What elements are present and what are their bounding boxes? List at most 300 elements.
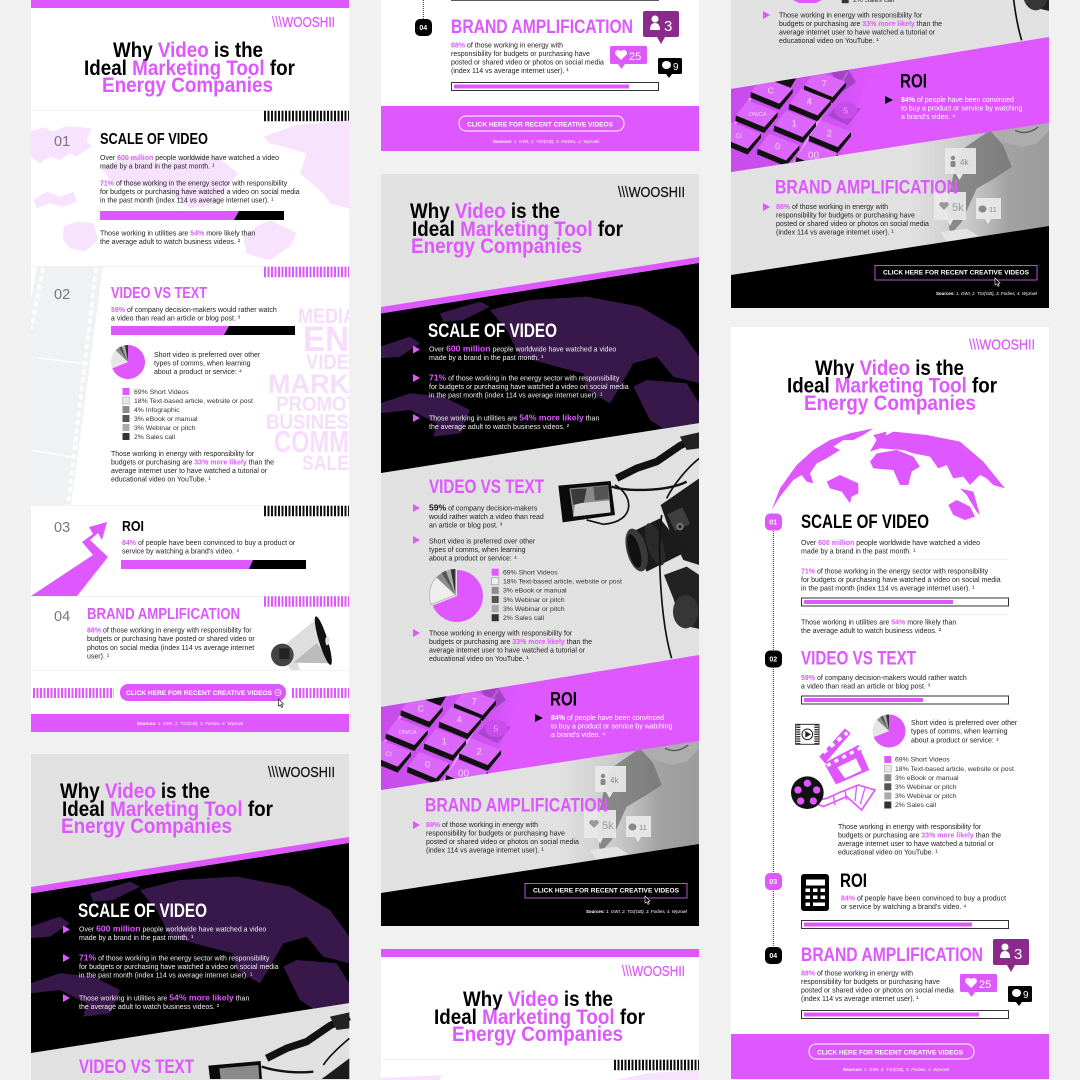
icon: rising arrow xyxy=(31,522,108,596)
calculator photo: 2 xyxy=(477,746,482,756)
button: call to action xyxy=(459,116,624,131)
icons: film and clapper xyxy=(791,724,875,810)
social badge: followers xyxy=(643,11,679,44)
section: video text end: budgets or purchasing are 33% more likely than the xyxy=(779,21,942,28)
timeline dotted line xyxy=(772,531,774,947)
section 02: video vs text: average internet user to have watched a tutorial or xyxy=(838,841,995,848)
title: Energy Companies xyxy=(61,815,232,838)
accent stripe xyxy=(31,837,349,894)
film strip background xyxy=(31,266,103,505)
black band xyxy=(31,843,349,1053)
button: call to action: CLICK HERE FOR RECENT CREATIVE VIDEOS xyxy=(533,888,680,894)
icon: video camera xyxy=(558,432,699,658)
section 03: ROI xyxy=(801,871,1008,928)
progress bar xyxy=(802,920,1008,928)
section 02: video vs text: Short video is preferred over other xyxy=(154,352,261,359)
pie legend xyxy=(122,388,253,441)
button: call to action: CLICK HERE FOR RECENT CREATIVE VIDEOS xyxy=(817,1049,964,1056)
section 04: brand amplification: BRAND AMPLIFICATION xyxy=(801,945,983,966)
title: Ideal Marketing Tool for xyxy=(84,57,295,80)
calculator photo xyxy=(719,52,871,182)
icon: video camera lower part xyxy=(1010,0,1049,40)
calculator photo: 5 xyxy=(493,724,498,734)
calculator photo: CI xyxy=(735,133,742,140)
pie chart base xyxy=(793,0,822,3)
section: brand amplification xyxy=(413,741,699,862)
pie legend: 69% Short Videos xyxy=(503,570,558,576)
section 02: video vs text: budgets or purchasing are 33% more likely than the xyxy=(111,460,274,467)
pie legend: 18% Text-based article, website or post xyxy=(134,398,253,405)
section 02: video vs text: budgets or purchasing are 33% more likely than the xyxy=(838,833,1001,840)
icon: video camera top xyxy=(208,1012,349,1079)
section 03: ROI: 03 xyxy=(54,520,70,536)
pie legend: 3% Webinar or pitch xyxy=(503,606,565,613)
icon: megaphone xyxy=(271,615,335,672)
logo: \\\WOOSHII xyxy=(618,184,685,201)
section: ROI band: a brand's video. ⁴ xyxy=(901,114,955,121)
title xyxy=(434,988,645,1046)
pie legend: 3% eBook or manual xyxy=(895,775,959,782)
section: brand amplification: BRAND AMPLIFICATION xyxy=(775,178,958,199)
social badge: comments xyxy=(1008,986,1032,1006)
section: scale of video: in the past month (index 114 vs average internet user). ¹ xyxy=(79,972,253,979)
section: scale of video: in the past month (index 114 vs average internet user). ¹ xyxy=(429,392,603,399)
button: call to action: CLICK HERE FOR RECENT CREATIVE VIDEOS xyxy=(467,121,614,128)
section 02: video vs text: 59% of company decision-makers would rather watch xyxy=(801,675,967,682)
section 04: brand amplification: BRAND AMPLIFICATION xyxy=(87,606,240,623)
section 01: scale of video: in the past month (index 114 vs average internet user). ¹ xyxy=(801,586,975,593)
calculator photo: 0 xyxy=(425,760,430,770)
section 04: brand amplification: 88% of those working in energy with responsibility for xyxy=(87,628,252,635)
badge 04: 04 xyxy=(769,953,777,960)
pie legend xyxy=(492,569,622,622)
footer: black band: Sources: 1. GWI, 2. TGI(GB), 3. Forbes, 4. Wyzowl xyxy=(936,291,1038,296)
social badge: comments: 9 xyxy=(673,62,679,73)
progress bar xyxy=(802,598,1008,606)
section: brand amplification: posted or shared video or photos on social media xyxy=(426,839,579,846)
section 02: video vs text: VIDEO VS TEXT xyxy=(111,285,207,302)
section 03: ROI: 84% of people have been convinced to buy a product or xyxy=(122,540,296,547)
pie legend: 2% Sales call xyxy=(134,434,176,441)
social badge: followers xyxy=(993,939,1029,972)
badge 02: 02 xyxy=(769,656,777,664)
section: ROI band xyxy=(719,37,1049,182)
roi bar end xyxy=(451,0,659,2)
progress bar xyxy=(111,326,295,335)
title: Energy Companies xyxy=(411,235,582,258)
pie chart xyxy=(429,569,483,622)
section 02: video vs text: types of comms, when learning xyxy=(911,729,1008,736)
calculator photo: 00 xyxy=(808,151,820,162)
calculator photo: ON/CA xyxy=(749,112,767,118)
word cloud: EN xyxy=(303,320,349,359)
pie legend: 69% Short Videos xyxy=(134,389,189,396)
pie legend: 18% Text-based article, website or post xyxy=(503,579,622,586)
section 02: video vs text xyxy=(791,648,1018,856)
section: scale of video: Over 600 million people worldwide have watched a video xyxy=(79,924,266,934)
progress bar xyxy=(100,211,284,220)
section: brand amplification: (index 114 vs average internet user). ¹ xyxy=(776,230,894,237)
section 01: scale of video xyxy=(54,131,300,246)
pie legend: 4% Infographic xyxy=(134,407,180,414)
section 01: scale of video: made by a brand in the past month. ¹ xyxy=(801,549,916,556)
pie legend: 18% Text-based article, website or post xyxy=(895,766,1014,773)
pie legend: 69% Short Videos xyxy=(895,757,950,764)
icon: cursor xyxy=(645,896,650,904)
section 04: brand amplification: budgets or purchasing have posted or shared video or xyxy=(87,636,255,643)
black band xyxy=(381,263,699,473)
pie legend: 3% eBook or manual xyxy=(134,416,198,423)
section 01: scale of video: the average adult to watch business videos. ² xyxy=(801,628,942,635)
social badge: likes xyxy=(610,46,647,69)
footer xyxy=(381,106,699,151)
section: ROI band: ROI xyxy=(900,72,927,93)
section 01: scale of video: made by a brand in the past month. ¹ xyxy=(100,164,215,171)
section 01: scale of video: for budgets or purchasing have watched a video on social media xyxy=(100,189,300,196)
title xyxy=(410,200,623,258)
section 04: brand amplification xyxy=(801,939,1032,1018)
footer: Sources: 1. GWI, 2. TGI(GB), 3. Forbes, 4. Wyzowl xyxy=(843,1067,950,1072)
notification: likes xyxy=(584,810,616,844)
calculator photo: 5 xyxy=(843,106,848,116)
section: video vs text: would rather watch a video than read xyxy=(428,514,544,521)
social badge: followers: 3 xyxy=(1014,946,1022,963)
section: video text end: Those working in energy with responsibility for xyxy=(779,12,923,20)
panel: timeline layout card, lower part in middle column xyxy=(381,0,699,151)
section 02: video vs text: educational video on YouTube. ¹ xyxy=(838,850,938,856)
section: scale of video: SCALE OF VIDEO xyxy=(428,321,557,342)
section 04: brand amplification: 04 xyxy=(54,609,70,625)
pie legend: 3% Webinar or pitch xyxy=(134,425,196,432)
section: scale of video: made by a brand in the past month. ¹ xyxy=(79,935,194,942)
badge 01: 01 xyxy=(769,520,777,526)
section: brand amplification: 88% of those working in energy with xyxy=(426,822,538,829)
title: Energy Companies xyxy=(452,1023,623,1046)
section 02: video vs text: about a product or service: ⁴ xyxy=(154,369,242,376)
notification: likes: 5k xyxy=(952,202,964,214)
button: call to action: CLICK HERE FOR RECENT CREATIVE VIDEOS xyxy=(883,270,1030,276)
notification: followers xyxy=(595,766,626,798)
social badge: likes: 25 xyxy=(629,51,641,63)
social badge: comments xyxy=(658,58,682,78)
footer: sources xyxy=(31,714,349,732)
notification: comments xyxy=(976,198,1001,224)
button: call to action xyxy=(525,884,687,898)
section: brand amplification: 88% of those working in energy with xyxy=(776,204,888,211)
section: video vs text: 59% of company decision-makers xyxy=(429,502,538,512)
section 02: video vs text: a video than read an article or blog post. ³ xyxy=(801,684,931,691)
progress bar xyxy=(802,1010,1008,1018)
section: video vs text: about a product or service: ⁴ xyxy=(429,555,517,562)
badge 01 xyxy=(765,514,782,530)
section: video vs text: types of comms, when learning xyxy=(429,547,526,554)
logo: \\\WOOSHII xyxy=(969,337,1035,354)
notification: comments xyxy=(626,816,651,842)
button: call to action xyxy=(875,266,1037,280)
section: scale of video: made by a brand in the past month. ¹ xyxy=(429,355,544,362)
panel: white layout card, top part in middle column xyxy=(381,949,699,1080)
icon: calculator xyxy=(801,874,829,911)
section: video text end: average internet user to have watched a tutorial or xyxy=(779,30,936,37)
section 01: scale of video: in the past month (index 114 vs average internet user). ¹ xyxy=(100,198,274,204)
section 01: scale of video: 71% of those working in the energy sector with responsibility xyxy=(801,569,989,576)
badge 04 xyxy=(765,947,782,964)
section: brand amplification: responsibility for budgets or purchasing have xyxy=(776,213,915,220)
footer xyxy=(731,1034,1049,1079)
panel: dark layout card, middle column xyxy=(369,174,700,926)
section: scale of video: the average adult to watch business videos. ² xyxy=(429,424,570,431)
section 01: scale of video: SCALE OF VIDEO xyxy=(801,512,929,533)
section: scale of video: the average adult to watch business videos. ² xyxy=(79,1004,220,1011)
section: scale of video: Over 600 million people worldwide have watched a video xyxy=(429,344,616,354)
pie legend: 3% Webinar or pitch xyxy=(895,784,957,791)
pie legend: 3% Webinar or pitch xyxy=(895,793,957,800)
section: brand amplification: posted or shared video or photos on social media xyxy=(451,60,604,66)
calculator photo: 4 xyxy=(807,97,812,107)
section 03: ROI: ROI xyxy=(122,518,144,535)
word cloud xyxy=(267,308,349,470)
footer: black band xyxy=(731,226,1049,308)
social badge: likes: 25 xyxy=(979,979,991,991)
section: video text end xyxy=(763,11,942,45)
pie legend: 3% eBook or manual xyxy=(503,588,567,595)
button: call to action xyxy=(120,684,286,701)
icon: cursor xyxy=(278,699,284,707)
section: ROI band: 84% of people have been convinced xyxy=(551,715,664,722)
section 04: brand amplification: 88% of those working in energy with xyxy=(801,970,913,978)
title: Why Video is the xyxy=(113,39,263,62)
section: ROI band: 84% of people have been convinced xyxy=(901,97,1014,104)
section: ROI band: to buy a product or service by watching xyxy=(551,724,673,731)
section 02: video vs text: Those working in energy with responsibility for xyxy=(111,451,255,458)
section: brand amplification: (index 114 vs average internet user). ¹ xyxy=(451,68,569,75)
badge 02 xyxy=(765,650,782,668)
word cloud: MEDIA xyxy=(298,305,356,328)
world map background xyxy=(381,1070,699,1080)
top accent bar xyxy=(381,949,699,957)
section 04: brand amplification: user). ¹ xyxy=(87,654,110,660)
button: call to action xyxy=(809,1044,974,1059)
section 04: brand amplification xyxy=(54,606,335,672)
section 01: scale of video: for budgets or purchasing have watched a video on social media xyxy=(801,577,1001,584)
section 01: scale of video: 71% of those working in the energy sector with responsibility xyxy=(100,180,288,188)
pie chart xyxy=(872,714,905,748)
section: ROI band: to buy a product or service by watching xyxy=(901,106,1023,113)
calculator photo: CI xyxy=(385,751,392,758)
title: Energy Companies xyxy=(102,74,273,97)
pie legend: 2% Sales call xyxy=(895,802,937,809)
heading: video vs text: VIDEO VS TEXT xyxy=(79,1057,194,1078)
section: scale of video: for budgets or purchasing have watched a video on social media xyxy=(429,384,629,391)
panel: white layout card, left column xyxy=(31,0,358,732)
word cloud: VIDE xyxy=(306,351,349,374)
calculator photo: 1 xyxy=(792,118,797,128)
pie legend: 3% Webinar or pitch xyxy=(503,597,565,604)
section: video vs text: Short video is preferred over other xyxy=(429,538,536,545)
section 02: video vs text xyxy=(54,285,295,484)
globe xyxy=(772,428,1005,520)
progress bar xyxy=(452,82,658,90)
section: brand amplification: posted or shared video or photos on social media xyxy=(776,221,929,228)
panel: dark layout card, lower part in right column xyxy=(719,0,1050,308)
section 02: video vs text: 02 xyxy=(54,287,70,303)
section 03: ROI: service by watching a brand's video. ⁴ xyxy=(122,549,239,556)
title xyxy=(787,357,997,415)
section 01: scale of video: Over 600 million people worldwide have watched a video xyxy=(100,155,279,162)
pie legend: 2% Sales call xyxy=(503,615,545,622)
section: video vs text: budgets or purchasing are 33% more likely than the xyxy=(429,639,592,646)
section: scale of video: SCALE OF VIDEO xyxy=(78,901,207,922)
section 04: brand amplification: posted or shared video or photos on social media xyxy=(801,988,954,994)
section: video vs text xyxy=(413,477,622,663)
section 03: ROI: ROI xyxy=(840,871,867,892)
section: ROI band xyxy=(381,655,699,790)
social badge: followers: 3 xyxy=(664,18,672,35)
logo: \\\WOOSHII xyxy=(268,764,335,781)
section: brand amplification: responsibility for budgets or purchasing have xyxy=(451,51,590,58)
section 01: scale of video: Those working in utilities are 54% more likely than xyxy=(801,620,956,627)
top accent bar xyxy=(31,0,349,8)
section: scale of video: Those working in utilities are 54% more likely than xyxy=(429,413,599,423)
badge 03: 03 xyxy=(769,879,777,886)
social badge: comments: 9 xyxy=(1023,990,1029,1001)
calculator photo: C xyxy=(768,85,774,95)
section: ROI band: a brand's video. ⁴ xyxy=(551,732,605,739)
photo: woman on phone xyxy=(580,741,699,862)
section 02: video vs text: 59% of company decision-makers would rather watch xyxy=(111,307,277,314)
calculator photo: ON/CA xyxy=(399,730,417,736)
section 02: video vs text: about a product or service: ⁴ xyxy=(911,737,999,744)
section 02: video vs text: VIDEO VS TEXT xyxy=(801,648,916,669)
calculator photo: 00 xyxy=(458,769,470,780)
section 02: video vs text: Short video is preferred over other xyxy=(911,720,1018,727)
section: brand amplification: 88% of those working in energy with xyxy=(451,42,563,50)
section: scale of video: Those working in utilities are 54% more likely than xyxy=(79,993,249,1003)
title: Why Video is the xyxy=(463,988,613,1011)
section 03: ROI xyxy=(31,518,306,596)
footer: Sources: 1. GWI, 2. TGI(GB), 3. Forbes, 4. Wyzowl xyxy=(493,139,600,144)
section: video vs text: average internet user to have watched a tutorial or xyxy=(429,648,586,655)
section: video vs text: VIDEO VS TEXT xyxy=(429,477,544,498)
section 04: brand amplification: photos on social media (index 114 vs average internet xyxy=(87,645,254,652)
notification: followers: 4k xyxy=(610,776,619,785)
calculator photo: 1 xyxy=(442,736,447,746)
calculator photo: 7 xyxy=(472,696,477,706)
notification: comments: 11 xyxy=(989,205,997,214)
section 04: brand amplification: (index 114 vs average internet user). ¹ xyxy=(801,996,919,1003)
section 01: scale of video xyxy=(801,512,1008,635)
section: scale of video: 71% of those working in the energy sector with responsibility xyxy=(429,372,620,382)
accent stripe xyxy=(381,257,699,314)
section 04: brand amplification: responsibility for budgets or purchasing have xyxy=(801,979,940,986)
section 03: ROI: or service by watching a brand's video. ⁴ xyxy=(841,904,966,911)
section: brand amplification: BRAND AMPLIFICATION xyxy=(451,17,633,38)
panel: timeline layout card, right column xyxy=(731,327,1049,1079)
section: brand amplification xyxy=(763,112,1050,252)
section: video vs text: educational video on YouTube. ¹ xyxy=(429,656,529,663)
notification: comments: 11 xyxy=(639,823,647,832)
title: Energy Companies xyxy=(804,392,976,415)
section 01: scale of video: Those working in utilities are 54% more likely than xyxy=(100,230,255,238)
section 02: video vs text: Those working in energy with responsibility for xyxy=(838,824,982,831)
word cloud: BUSINES xyxy=(266,411,349,434)
badge 04: 04 xyxy=(419,25,427,32)
social badge: likes xyxy=(960,974,997,997)
calculator photo: 0 xyxy=(775,142,780,152)
logo: \\\WOOSHII xyxy=(272,14,335,31)
footer: sources: Sources: 1. GWI, 2. TGI(GB), 3. Forbes, 4. Wyzowl xyxy=(137,721,244,726)
title xyxy=(60,780,273,838)
section 03: ROI: 84% of people have been convinced to buy a product xyxy=(841,896,1006,903)
section: video vs text: Those working in energy with responsibility for xyxy=(429,630,573,638)
section: video vs text: an article or blog post. ³ xyxy=(429,522,503,530)
section 01: scale of video: 01 xyxy=(54,134,70,150)
section: scale of video xyxy=(413,321,629,431)
word cloud: MARK xyxy=(268,369,349,399)
title: Ideal Marketing Tool for xyxy=(412,218,623,241)
section: brand amplification xyxy=(451,11,682,90)
notification: followers: 4k xyxy=(960,158,969,167)
section 01: scale of video: the average adult to watch business videos. ² xyxy=(100,239,241,246)
title xyxy=(84,39,295,97)
footer: black band: Sources: 1. GWI, 2. TGI(GB), 3. Forbes, 4. Wyzowl xyxy=(586,909,688,914)
section: ROI band: ROI xyxy=(550,690,577,711)
notification: likes: 5k xyxy=(602,820,614,832)
badge 04 xyxy=(415,19,432,36)
pie legend xyxy=(884,756,1014,809)
pie chart xyxy=(111,345,145,379)
title: Ideal Marketing Tool for xyxy=(434,1006,645,1029)
word cloud: SALE xyxy=(302,452,349,475)
title: Ideal Marketing Tool for xyxy=(787,375,997,398)
title: Why Video is the xyxy=(60,780,210,803)
calculator photo xyxy=(381,684,521,790)
section: scale of video xyxy=(63,901,279,1011)
globe xyxy=(30,877,349,1017)
word cloud: PROMOT xyxy=(276,393,358,416)
calculator photo: 7 xyxy=(822,78,827,88)
section: video text end: educational video on YouTube. ¹ xyxy=(779,38,879,45)
world map background xyxy=(31,121,349,260)
button: call to action: CLICK HERE FOR RECENT CREATIVE VIDEOS xyxy=(126,690,273,697)
notification: followers xyxy=(945,148,976,180)
section: brand amplification: BRAND AMPLIFICATION xyxy=(425,796,608,817)
globe xyxy=(380,297,699,437)
footer: black band xyxy=(381,844,699,926)
section: brand amplification: responsibility for budgets or purchasing have xyxy=(426,831,565,838)
section: scale of video: 71% of those working in the energy sector with responsibility xyxy=(79,952,270,962)
section 01: scale of video: SCALE OF VIDEO xyxy=(100,131,208,148)
section: scale of video: for budgets or purchasing have watched a video on social media xyxy=(79,964,279,971)
photo: woman on phone xyxy=(910,112,1050,252)
title: Why Video is the xyxy=(410,200,560,223)
notification: likes xyxy=(934,192,966,226)
word cloud: COMM xyxy=(274,424,349,459)
section 02: video vs text: educational video on YouTube. ¹ xyxy=(111,477,211,484)
progress bar xyxy=(121,560,306,569)
badge 03 xyxy=(765,873,782,890)
section 01: scale of video: Over 600 million people worldwide have watched a video xyxy=(801,540,980,547)
section 02: video vs text: average internet user to have watched a tutorial or xyxy=(111,468,268,475)
calculator photo: 2 xyxy=(827,128,832,138)
title: Why Video is the xyxy=(815,357,964,380)
icon: cursor xyxy=(995,278,1000,286)
calculator photo: C xyxy=(418,703,424,713)
panel: dark layout card, partial copy in left column xyxy=(30,754,349,1080)
calculator photo: 4 xyxy=(457,715,462,725)
title: Ideal Marketing Tool for xyxy=(62,798,273,821)
section: brand amplification: (index 114 vs average internet user). ¹ xyxy=(426,848,544,855)
